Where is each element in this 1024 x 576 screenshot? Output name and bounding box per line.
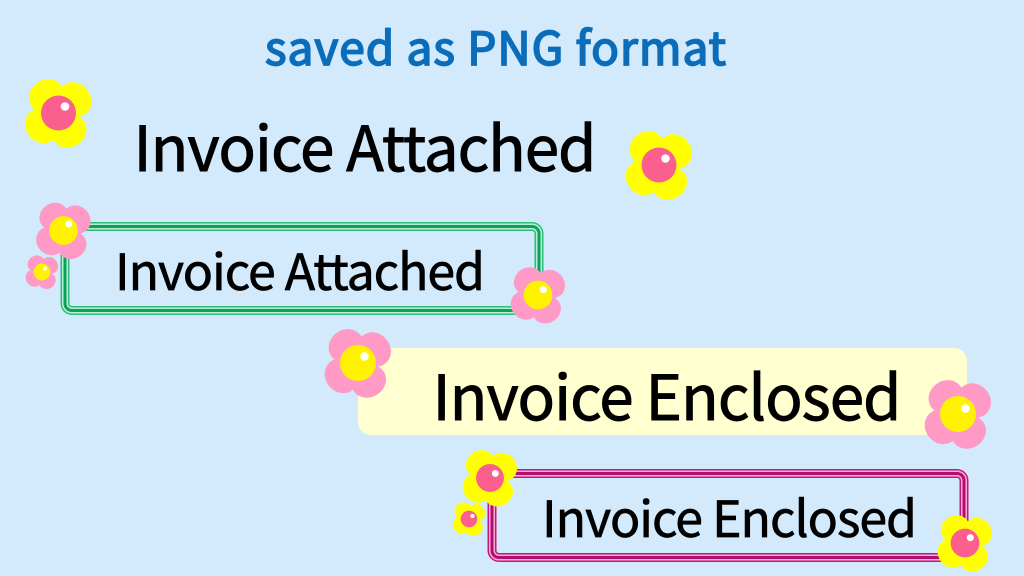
panel: pale yellow label bbox=[358, 348, 967, 438]
icon: yellow flower right of heading bbox=[619, 124, 699, 206]
icon: small yellow flower bbox=[449, 499, 489, 539]
label text: Invoice Attached framed: Invoice Attached bbox=[115, 233, 485, 305]
heading: Invoice Attached plain: Invoice Attached bbox=[134, 99, 596, 189]
title: saved as PNG format bbox=[265, 13, 726, 79]
icon: yellow flower on magenta frame top left bbox=[457, 445, 523, 512]
label text: Invoice Enclosed on yellow: Invoice Enclosed bbox=[432, 348, 902, 438]
icon: small pink flower bbox=[22, 252, 62, 292]
icon: pink flower bottom right of yellow label bbox=[918, 373, 998, 455]
icon: pink flower on green frame bottom right bbox=[505, 262, 571, 329]
icon: yellow flower top left bbox=[18, 72, 98, 154]
label text: Invoice Enclosed framed: Invoice Enclosed bbox=[542, 480, 917, 552]
icon: yellow flower on magenta frame bottom right bbox=[932, 510, 998, 576]
panel: magenta framed label bbox=[492, 474, 964, 558]
icon: pink flower top left of yellow label bbox=[318, 322, 398, 404]
panel: green framed label bbox=[65, 226, 539, 310]
icon: pink flower on green frame top left bbox=[31, 197, 96, 264]
